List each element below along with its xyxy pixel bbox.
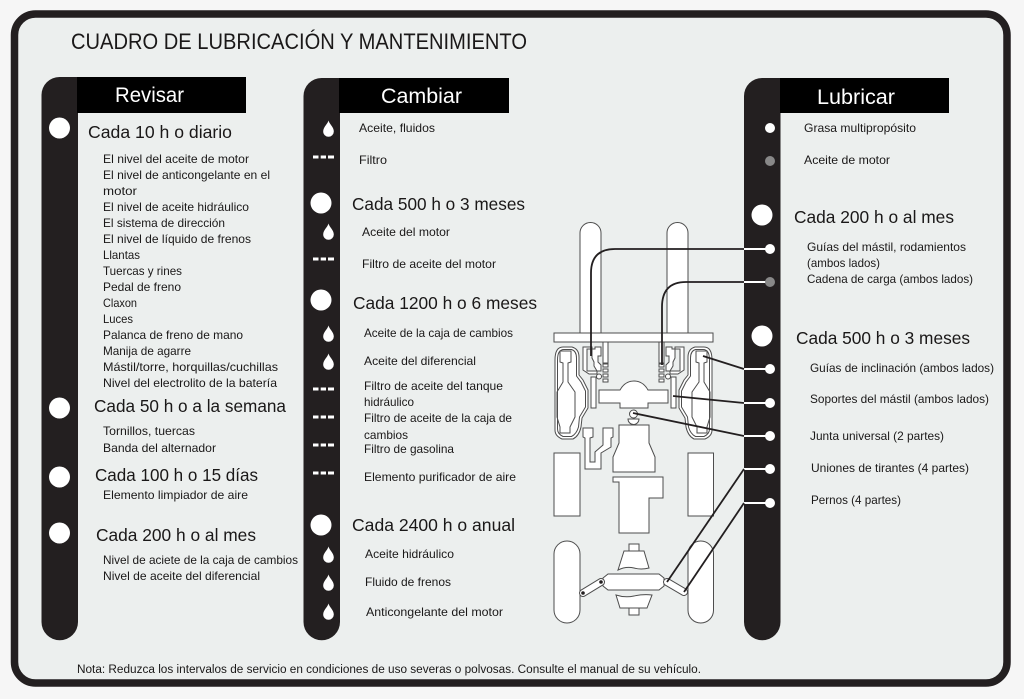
group: cada 1200 h: hidráulico — [364, 395, 414, 409]
group: cada 10 h o diario: El sistema de dirección — [103, 216, 225, 230]
group: cada 10 h o diario: Cada 10 h o diario — [88, 122, 232, 142]
seat block — [613, 477, 663, 533]
group: cada 100 h — [49, 465, 258, 502]
forks and mast bar — [554, 223, 713, 342]
group: cada 10 h o diario: motor — [103, 184, 137, 198]
group: cada 500 h — [744, 326, 994, 508]
heading: lubricar — [780, 78, 949, 113]
differential — [599, 381, 668, 408]
column bar: revisar — [42, 77, 78, 640]
universal joint — [628, 410, 639, 425]
group: cada 1200 h: Filtro de aceite del tanque — [364, 379, 503, 393]
heading: cambiar — [339, 78, 509, 113]
group: cada 500 h: Filtro de aceite del motor — [362, 257, 496, 271]
group: cada 200 h: Cada 200 h o al mes — [794, 207, 954, 227]
legend: cambiar: Aceite, fluidos — [359, 121, 435, 135]
group: cada 2400 h — [310, 514, 515, 620]
group: cada 1200 h: Filtro de gasolina — [364, 442, 454, 456]
group: cada 10 h o diario: El nivel de aceite hidráulico — [103, 200, 249, 214]
group: cada 200 h: Cada 200 h o al mes — [96, 525, 256, 545]
heading: revisar — [77, 77, 246, 113]
group: cada 500 h: Cada 500 h o 3 meses — [352, 194, 525, 214]
group: cada 2400 h: Aceite hidráulico — [365, 547, 454, 561]
group: cada 10 h o diario: El nivel del aceite de motor — [103, 152, 249, 166]
heading: revisar: Revisar — [115, 84, 184, 107]
group: cada 10 h o diario: El nivel de líquido de frenos — [103, 232, 251, 246]
legend: lubricar — [765, 121, 916, 167]
group: cada 1200 h: Aceite del diferencial — [364, 354, 476, 368]
group: cada 50 h: Banda del alternador — [103, 441, 216, 455]
steering links — [581, 580, 684, 595]
engine — [613, 425, 655, 472]
panel: lubricar — [744, 78, 994, 640]
middle wheels — [554, 453, 714, 516]
group: cada 10 h o diario: El nivel de anticongelante en el — [103, 168, 270, 182]
group: cada 50 h: Tornillos, tuercas — [103, 424, 195, 438]
group: cada 500 h: Uniones de tirantes (4 partes) — [811, 461, 969, 475]
group: cada 200 h — [744, 204, 973, 287]
legend: cambiar: Filtro — [359, 153, 387, 167]
group: cada 10 h o diario: Llantas — [103, 248, 140, 262]
title: CUADRO DE LUBRICACIÓN Y MANTENIMIENTO — [71, 29, 527, 54]
rear axle — [603, 544, 664, 615]
group: cada 2400 h: Cada 2400 h o anual — [352, 515, 515, 535]
group: cada 10 h o diario: Manija de agarre — [103, 344, 191, 358]
group: cada 10 h o diario: Tuercas y rines — [103, 264, 182, 278]
rear wheels — [554, 541, 714, 623]
group: cada 10 h o diario: Pedal de freno — [103, 280, 181, 294]
group: cada 10 h o diario: Mástil/torre, horquillas/cuchillas — [103, 360, 278, 374]
group: cada 10 h o diario — [49, 118, 278, 390]
group: cada 1200 h: Aceite de la caja de cambios — [364, 326, 513, 340]
group: cada 1200 h: cambios — [364, 428, 408, 442]
group: cada 500 h: Cada 500 h o 3 meses — [796, 328, 970, 348]
group: cada 10 h o diario: Luces — [103, 312, 133, 326]
column bar: lubricar — [744, 78, 780, 640]
transmission pipe — [583, 428, 613, 469]
legend: lubricar: Grasa multipropósito — [804, 121, 916, 135]
diagram: forklift chassis — [554, 223, 714, 623]
group: cada 200 h: Nivel de aciete de la caja de cambios — [103, 553, 298, 567]
right side assembly — [659, 342, 712, 439]
group: cada 1200 h: Cada 1200 h o 6 meses — [353, 293, 537, 313]
group: cada 500 h: Guías de inclinación (ambos lados) — [810, 361, 994, 375]
group: cada 50 h: Cada 50 h o a la semana — [94, 396, 286, 416]
group: cada 1200 h: Elemento purificador de aire — [364, 470, 516, 484]
group: cada 2400 h: Anticongelante del motor — [366, 605, 503, 619]
group: cada 50 h — [49, 396, 286, 455]
group: cada 200 h: Cadena de carga (ambos lados) — [807, 272, 973, 286]
group: cada 1200 h: Filtro de aceite de la caja de — [364, 411, 512, 425]
group: cada 100 h: Elemento limpiador de aire — [103, 488, 248, 502]
group: cada 200 h: (ambos lados) — [807, 256, 880, 270]
leader lines — [591, 249, 744, 592]
panel: revisar — [42, 77, 298, 640]
group: cada 200 h: Nivel de aceite del diferencial — [103, 569, 260, 583]
group: cada 10 h o diario: Claxon — [103, 296, 137, 310]
legend: lubricar: Aceite de motor — [804, 153, 890, 167]
left side assembly — [555, 342, 608, 439]
group: cada 500 h — [310, 192, 525, 271]
group: cada 500 h: Aceite del motor — [362, 225, 450, 239]
heading: cambiar: Cambiar — [381, 85, 462, 108]
group: cada 2400 h: Fluido de frenos — [365, 575, 451, 589]
group: cada 500 h: Junta universal (2 partes) — [810, 429, 944, 443]
group: cada 500 h: Pernos (4 partes) — [811, 493, 901, 507]
group: cada 200 h — [49, 522, 298, 583]
footnote: Nota: Reduzca los intervalos de servicio en condiciones de uso severas o polvosas. Consulte el manual de su vehículo. — [77, 664, 701, 676]
group: cada 200 h: Guías del mástil, rodamientos — [807, 240, 966, 254]
legend: cambiar — [313, 120, 435, 167]
group: cada 500 h: Soportes del mástil (ambos lados) — [810, 392, 989, 406]
column bar: cambiar — [304, 78, 340, 640]
group: cada 10 h o diario: Nivel del electrolito de la batería — [103, 376, 277, 390]
heading: lubricar: Lubricar — [817, 86, 895, 109]
panel: cambiar — [304, 78, 537, 640]
group: cada 100 h: Cada 100 h o 15 días — [95, 465, 258, 485]
group: cada 1200 h — [310, 290, 537, 484]
group: cada 10 h o diario: Palanca de freno de mano — [103, 328, 243, 342]
